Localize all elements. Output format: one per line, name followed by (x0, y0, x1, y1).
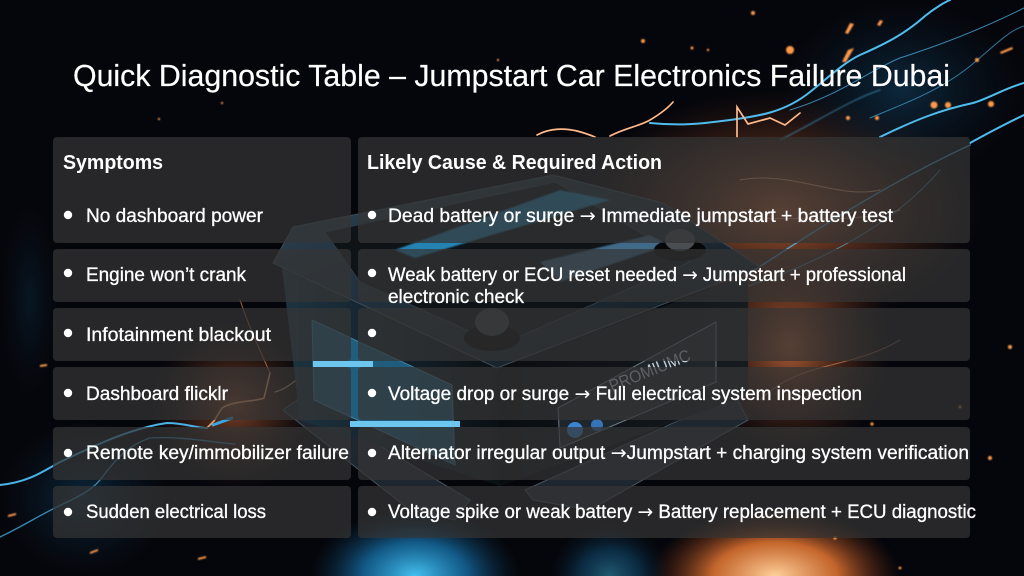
right label with brand (558, 322, 716, 448)
right label with brand: PROMIUMC (606, 346, 693, 396)
causes and actions column: electronic check (388, 287, 524, 308)
lightning: orange arcs centre (537, 102, 900, 220)
causes and actions column (368, 205, 976, 523)
battery left face (282, 268, 500, 486)
symptoms column: Engine won’t crank (86, 265, 246, 286)
battery illustration (273, 175, 760, 520)
symptoms column (64, 206, 349, 523)
lid panel highlight (540, 235, 668, 282)
left blue label (312, 320, 455, 465)
symptoms column: No dashboard power (86, 206, 264, 227)
title: Quick Diagnostic Table – Jumpstart Car Electronics Failure Dubai (73, 58, 950, 93)
battery lid (273, 175, 760, 368)
symptoms column: Sudden electrical loss (86, 502, 266, 523)
causes and actions column: Voltage drop or surge → Full electrical system inspection (388, 383, 862, 405)
causes and actions column: Weak battery or ECU reset needed → Jumpstart + professional (388, 264, 906, 286)
lightning: blue arcs upper right (640, 0, 1024, 340)
battery lid raised section (325, 182, 690, 345)
blue lid strip (395, 190, 610, 258)
left label bright stripes (313, 361, 460, 427)
terminal front (464, 308, 520, 351)
symptoms column: Dashboard flicklr (86, 384, 229, 405)
causes and actions column: Alternator irregular output →Jumpstart + charging system verification (388, 442, 969, 464)
battery feet (283, 395, 748, 520)
terminal back (654, 229, 706, 261)
table header: likely cause and required action: Likely Cause & Required Action (367, 152, 662, 174)
lightning: left side blue and orange (0, 300, 900, 537)
symptoms column: Remote key/immobilizer failure (86, 443, 349, 464)
battery right face (497, 275, 748, 486)
causes and actions column: Voltage spike or weak battery → Battery replacement + ECU diagnostic (388, 501, 976, 523)
table panel backgrounds (53, 137, 970, 538)
causes and actions column: Dead battery or surge → Immediate jumpstart + battery test (388, 205, 894, 227)
symptoms column: Infotainment blackout (86, 325, 272, 346)
table header: symptoms: Symptoms (63, 152, 163, 174)
